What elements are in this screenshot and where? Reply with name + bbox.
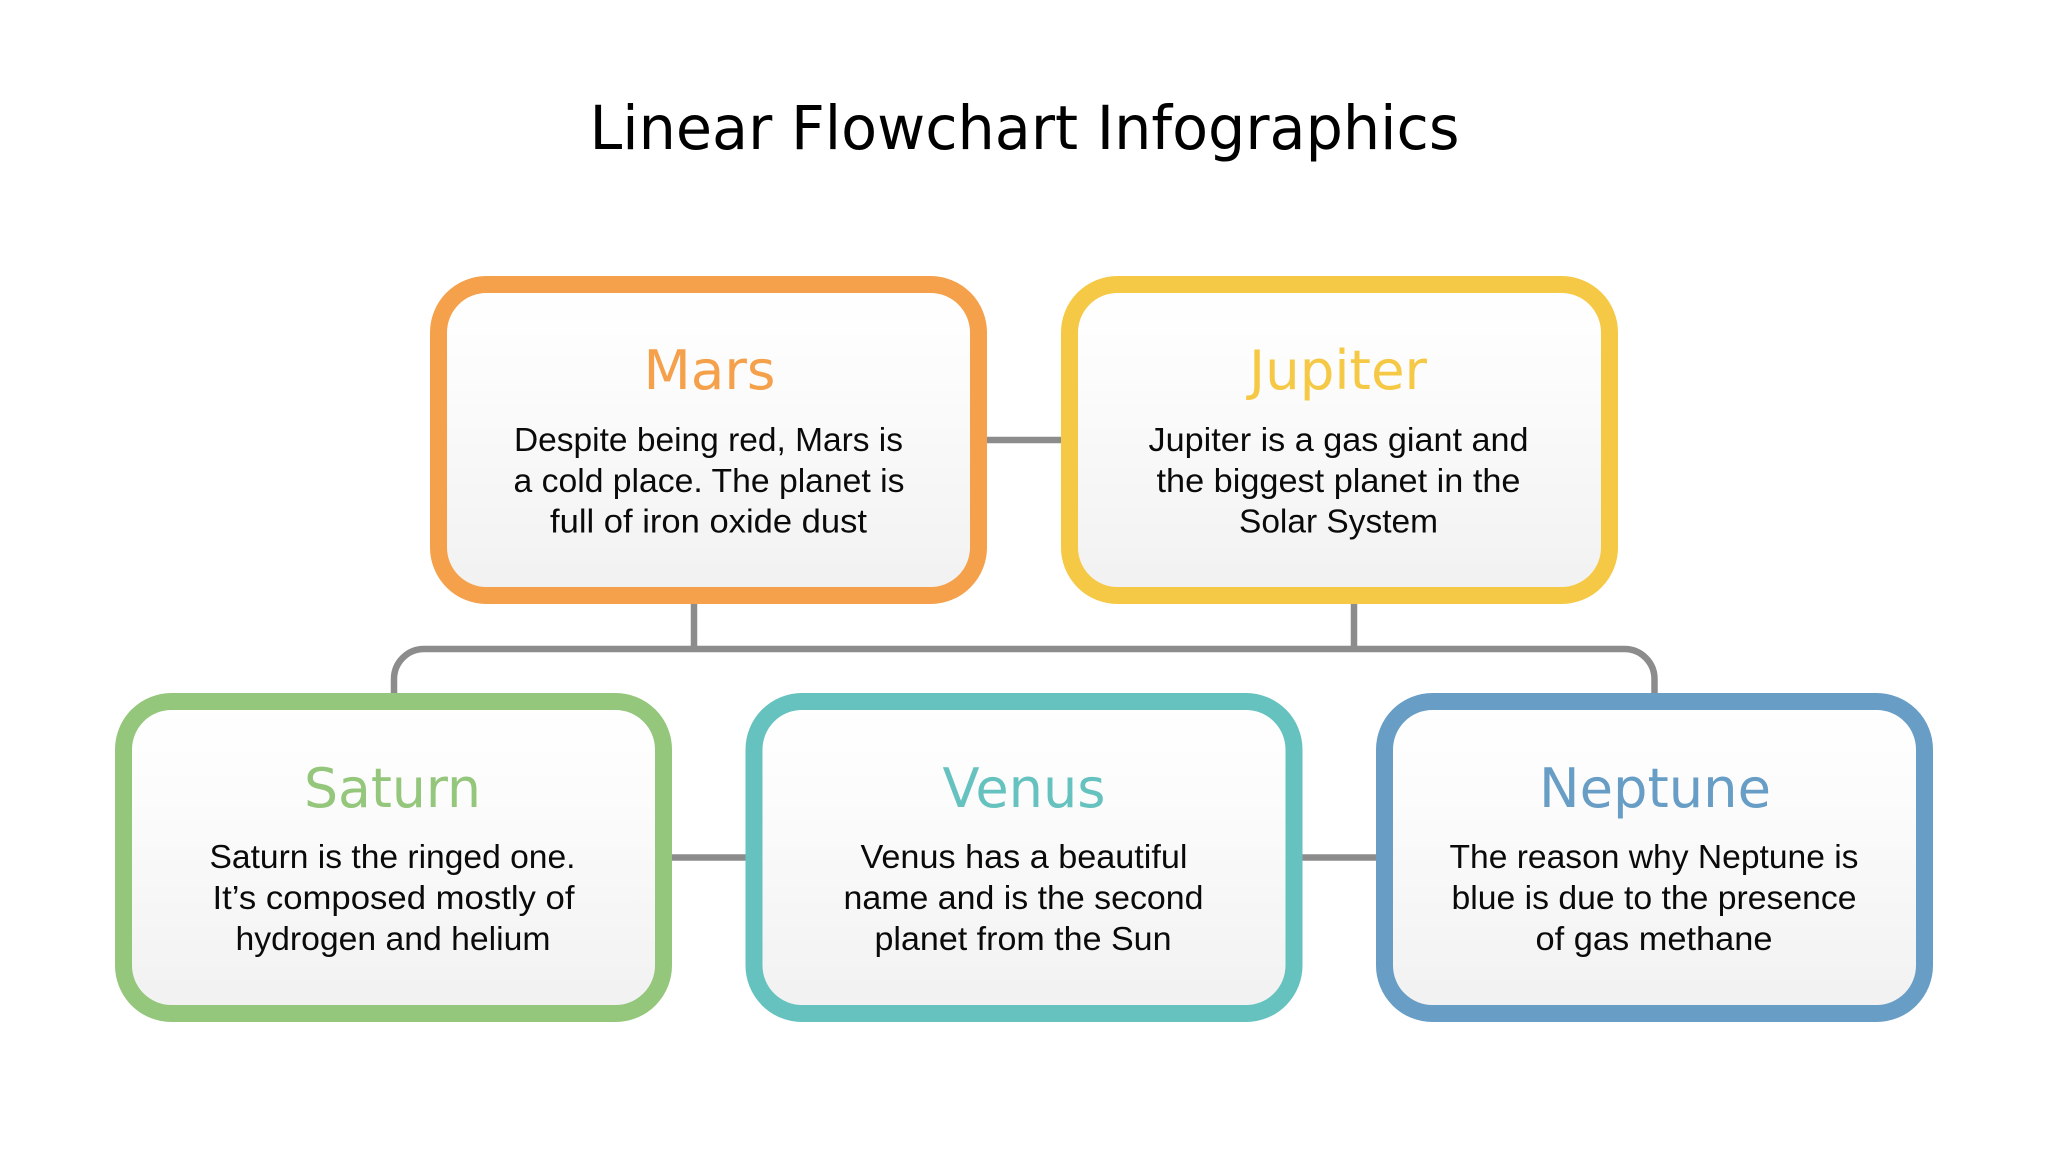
text: Neptune description: blue is due to the presence [1452,879,1856,916]
panel: Venus [754,702,1294,1014]
text: Jupiter description: Solar System [1239,502,1438,540]
connector: Mars to Jupiter [985,437,1063,443]
text: Venus description: Venus has a beautiful [860,838,1188,875]
text: Venus description: name and is the second [844,879,1204,916]
panel: Neptune [1384,702,1924,1014]
text: Jupiter description: the biggest planet in the [1156,462,1520,499]
text: Saturn description: It’s composed mostly of [212,879,575,916]
text: Venus description [844,838,1204,957]
text: Mars description: Despite being red, Mars is [514,421,903,458]
text: Jupiter description: Jupiter is a gas giant and [1148,421,1528,458]
title: Linear Flowchart Infographics [590,93,1460,164]
panel: Jupiter [1070,284,1610,596]
text: Mars description: a cold place. The planet is [514,462,904,499]
heading: Jupiter: Jupiter [1246,339,1428,402]
text: Jupiter description [1148,421,1528,540]
text: Neptune description: of gas methane [1536,920,1772,957]
text: Mars description [514,421,904,540]
text: Venus description: planet from the Sun [874,920,1172,957]
heading: Saturn: Saturn [304,757,481,820]
panel: Saturn [124,702,664,1014]
heading: Neptune: Neptune [1539,757,1771,820]
text: Saturn description: Saturn is the ringed one. [210,838,576,875]
heading: Venus: Venus [942,757,1106,820]
panel: Mars [438,284,978,596]
text: Neptune description: The reason why Neptune is [1450,838,1858,875]
text: Saturn description: hydrogen and helium [236,920,550,957]
connector: Saturn to Venus [670,854,748,861]
text: Saturn description [210,838,576,957]
text: Neptune description [1450,838,1858,957]
connector: bus linking top row to bottom row [394,600,1654,696]
connector: Venus to Neptune [1300,854,1378,861]
heading: Mars: Mars [644,339,776,402]
text: Mars description: full of iron oxide dust [550,502,867,540]
